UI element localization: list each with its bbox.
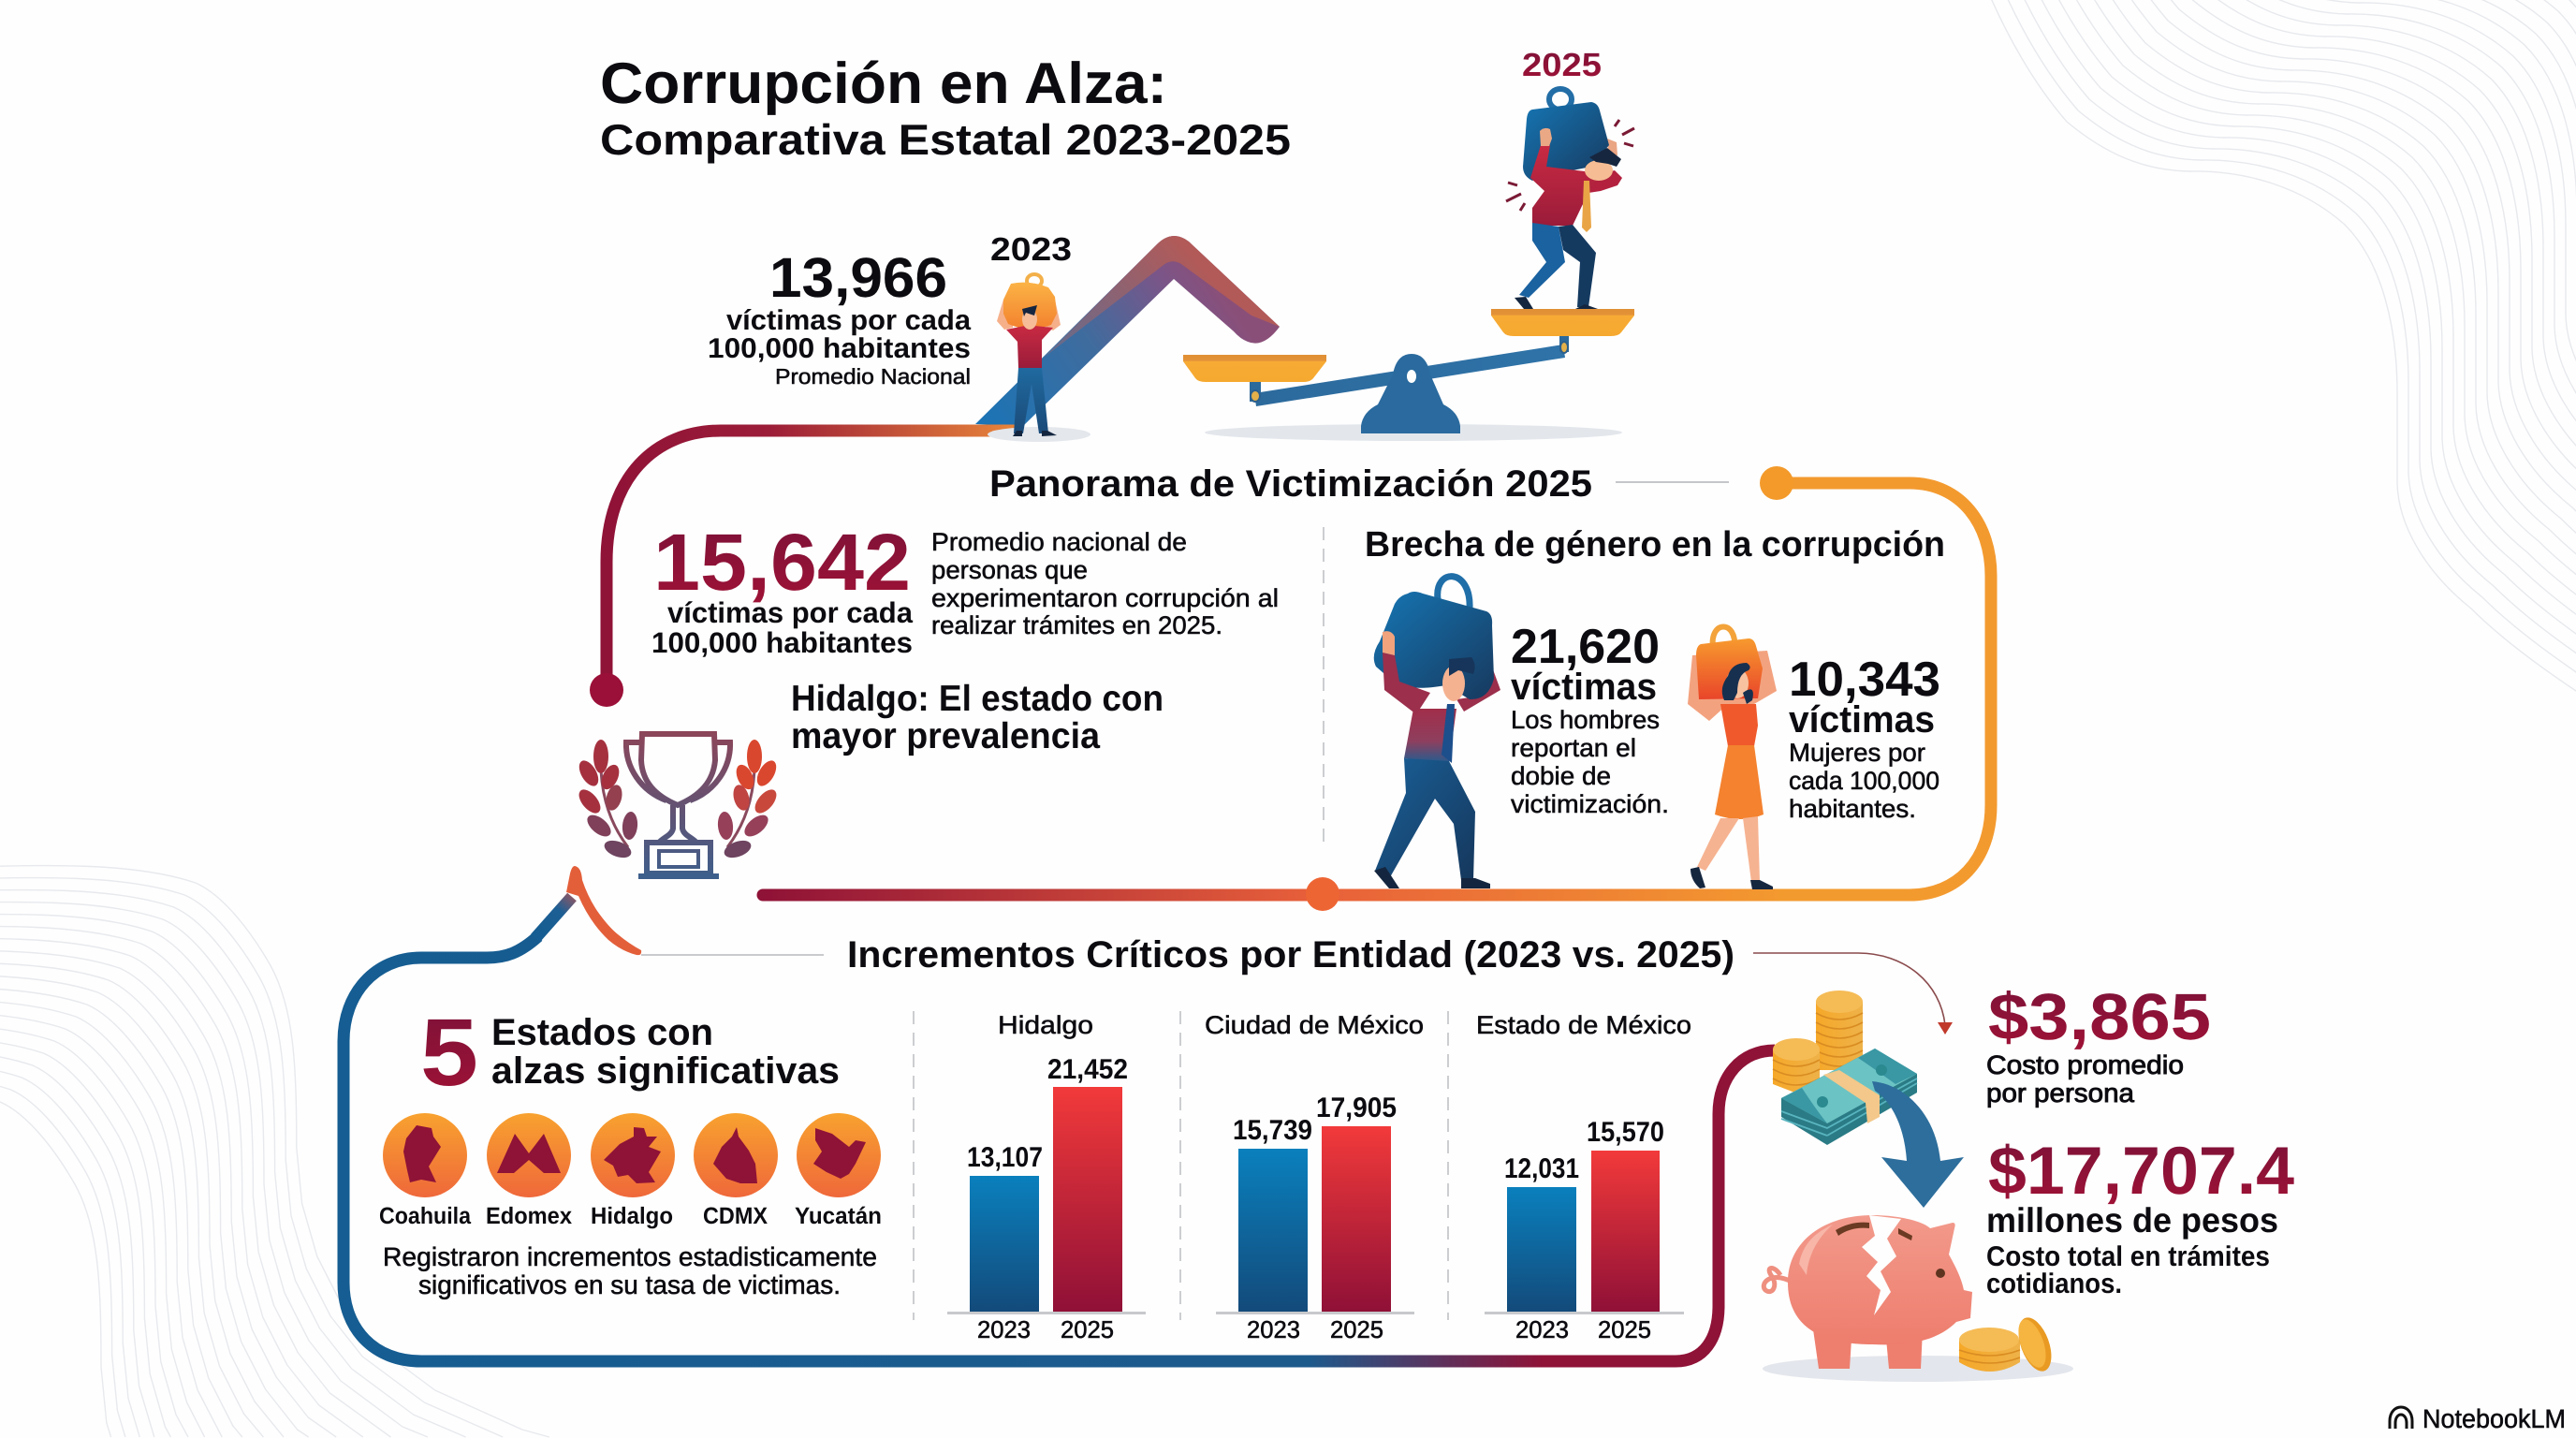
path end dot	[590, 673, 623, 707]
panel: economic cost	[1753, 953, 2294, 1382]
connector line: blue to maroon frame	[344, 866, 1775, 1361]
cost per person	[1986, 980, 2211, 1108]
Hidalgo callout	[791, 679, 1164, 756]
men statistic: reportan el	[1511, 734, 1636, 762]
panel: Incrementos Críticos por Entidad	[344, 866, 1775, 1361]
bar chart: Ciudad de México	[1205, 1011, 1424, 1343]
women statistic: Mujeres por	[1789, 739, 1925, 767]
states description: significativos en su tasa de victimas.	[418, 1270, 841, 1299]
bar chart: Ciudad de México: 17,905	[1316, 1093, 1397, 1123]
icon: person carrying heavy weight 2025	[1506, 89, 1634, 309]
description text: Promedio nacional de	[931, 528, 1187, 556]
heading: Panorama de Victimización 2025	[989, 463, 1592, 505]
description text	[931, 528, 1279, 639]
icon: broken piggy bank	[1763, 1215, 2073, 1382]
bar chart: Estado de México	[1476, 1011, 1691, 1343]
Hidalgo callout: Hidalgo: El estado con	[791, 679, 1164, 719]
total cost: $17,707.4	[1988, 1134, 2294, 1209]
big statistic 15,642: víctimas por cada	[667, 596, 914, 629]
year label 2023: 2023	[990, 231, 1072, 268]
bar chart: Ciudad de México: 2025	[1330, 1315, 1383, 1343]
2023 statistic: Promedio Nacional	[775, 364, 971, 389]
total cost: Costo total en trámites	[1986, 1241, 2270, 1272]
heading: Incrementos Críticos por Entidad (2023 vs. 2025)	[847, 934, 1734, 976]
title: Comparativa Estatal 2023-2025	[600, 115, 1291, 164]
Hidalgo callout: mayor prevalencia	[791, 716, 1100, 756]
state labels: Edomex	[486, 1203, 572, 1229]
states description: Registraron incrementos estadisticamente	[383, 1242, 877, 1271]
states description	[383, 1242, 877, 1299]
title: Corrupción en Alza:	[600, 51, 1167, 116]
icon: coins and money	[1773, 990, 1917, 1145]
panel: hero 2023 vs 2025	[590, 47, 1634, 707]
bar chart: Ciudad de México: Ciudad de México	[1205, 1011, 1424, 1039]
icon: person carrying small weight 2023	[988, 274, 1090, 442]
icon: gold coins	[1959, 1313, 2057, 1375]
heading: gender gap: Brecha de género en la corrupción	[1365, 525, 1945, 565]
bar chart: Hidalgo: Hidalgo	[998, 1011, 1093, 1039]
women statistic: víctimas	[1789, 699, 1935, 741]
bar chart: Hidalgo: 13,107	[967, 1142, 1043, 1173]
arrow: thin curved arrow to cost	[1753, 953, 1953, 1034]
five states headline: 5	[420, 999, 478, 1106]
icon: CDMX	[694, 1113, 778, 1197]
state labels: Yucatán	[795, 1203, 882, 1229]
2023 statistic: víctimas por cada	[726, 305, 971, 336]
bar chart: Estado de México: 2025	[1598, 1315, 1651, 1343]
state labels: Hidalgo	[591, 1203, 673, 1229]
description text: personas que	[931, 556, 1088, 584]
description text: realizar trámites en 2025.	[931, 611, 1222, 639]
women statistic: 10,343	[1789, 653, 1940, 707]
bar chart: Estado de México: 2023	[1515, 1315, 1569, 1343]
big statistic 15,642: 100,000 habitantes	[651, 626, 913, 659]
icon: man carrying big weight	[1374, 577, 1500, 888]
year label 2025: 2025	[1522, 47, 1602, 83]
total cost: millones de pesos	[1986, 1201, 2278, 1240]
state labels	[379, 1203, 882, 1229]
title	[600, 51, 1291, 164]
bar chart: Hidalgo: 2025	[1061, 1315, 1114, 1343]
bar chart: Hidalgo	[947, 1011, 1146, 1343]
cost per person: por persona	[1986, 1078, 2134, 1108]
panel: Panorama de Victimización 2025	[575, 463, 1991, 911]
men statistic: dobie de	[1511, 762, 1611, 790]
logo: NotebookLM: NotebookLM	[2422, 1404, 2566, 1433]
bar chart: Estado de México: 12,031	[1504, 1153, 1579, 1184]
women statistic: habitantes.	[1789, 795, 1916, 823]
state labels: CDMX	[703, 1203, 768, 1229]
bar chart: Estado de México: Estado de México	[1476, 1011, 1691, 1039]
men statistic: 21,620	[1511, 620, 1660, 674]
icon: Yucatán	[797, 1113, 881, 1197]
men statistic: victimización.	[1511, 790, 1669, 818]
women statistic: cada 100,000	[1789, 767, 1939, 795]
connector line: top path	[607, 431, 1016, 690]
icon: trophy with laurels	[575, 734, 781, 879]
icon: Coahuila	[383, 1113, 467, 1197]
connector line: orange loop	[763, 466, 1991, 911]
state labels: Coahuila	[379, 1203, 472, 1229]
arrow: rising then falling trend	[975, 236, 1280, 426]
arrow: blue curved downward	[1872, 1081, 1964, 1208]
icon: balance scale	[1183, 309, 1634, 441]
total cost	[1986, 1134, 2294, 1299]
bar chart: Estado de México: 15,570	[1587, 1117, 1664, 1148]
2023 statistic: 13,966	[769, 246, 947, 309]
state icons	[383, 1113, 881, 1197]
women statistic	[1789, 653, 1940, 823]
bar chart: Ciudad de México: 2023	[1247, 1315, 1300, 1343]
five states headline: Estados con	[491, 1012, 713, 1053]
cost per person: $3,865	[1988, 980, 2211, 1053]
men statistic	[1511, 620, 1669, 818]
big statistic 15,642	[651, 518, 914, 659]
five states headline: alzas significativas	[491, 1050, 840, 1092]
2023 statistic	[708, 246, 971, 389]
big statistic 15,642: 15,642	[653, 518, 911, 608]
description text: experimentaron corrupción al	[931, 584, 1279, 612]
icon: woman carrying medium weight	[1688, 627, 1777, 889]
bar chart: Hidalgo: 21,452	[1047, 1054, 1128, 1085]
cost per person: Costo promedio	[1986, 1050, 2184, 1079]
icon: Hidalgo	[591, 1113, 675, 1197]
men statistic: víctimas	[1511, 667, 1657, 708]
icon: Edomex	[487, 1113, 571, 1197]
five states headline	[420, 999, 840, 1106]
bar chart: Hidalgo: 2023	[977, 1315, 1031, 1343]
men statistic: Los hombres	[1511, 706, 1660, 734]
2023 statistic: 100,000 habitantes	[708, 333, 971, 364]
bar chart: Ciudad de México: 15,739	[1233, 1115, 1312, 1146]
total cost: cotidianos.	[1986, 1269, 2122, 1299]
